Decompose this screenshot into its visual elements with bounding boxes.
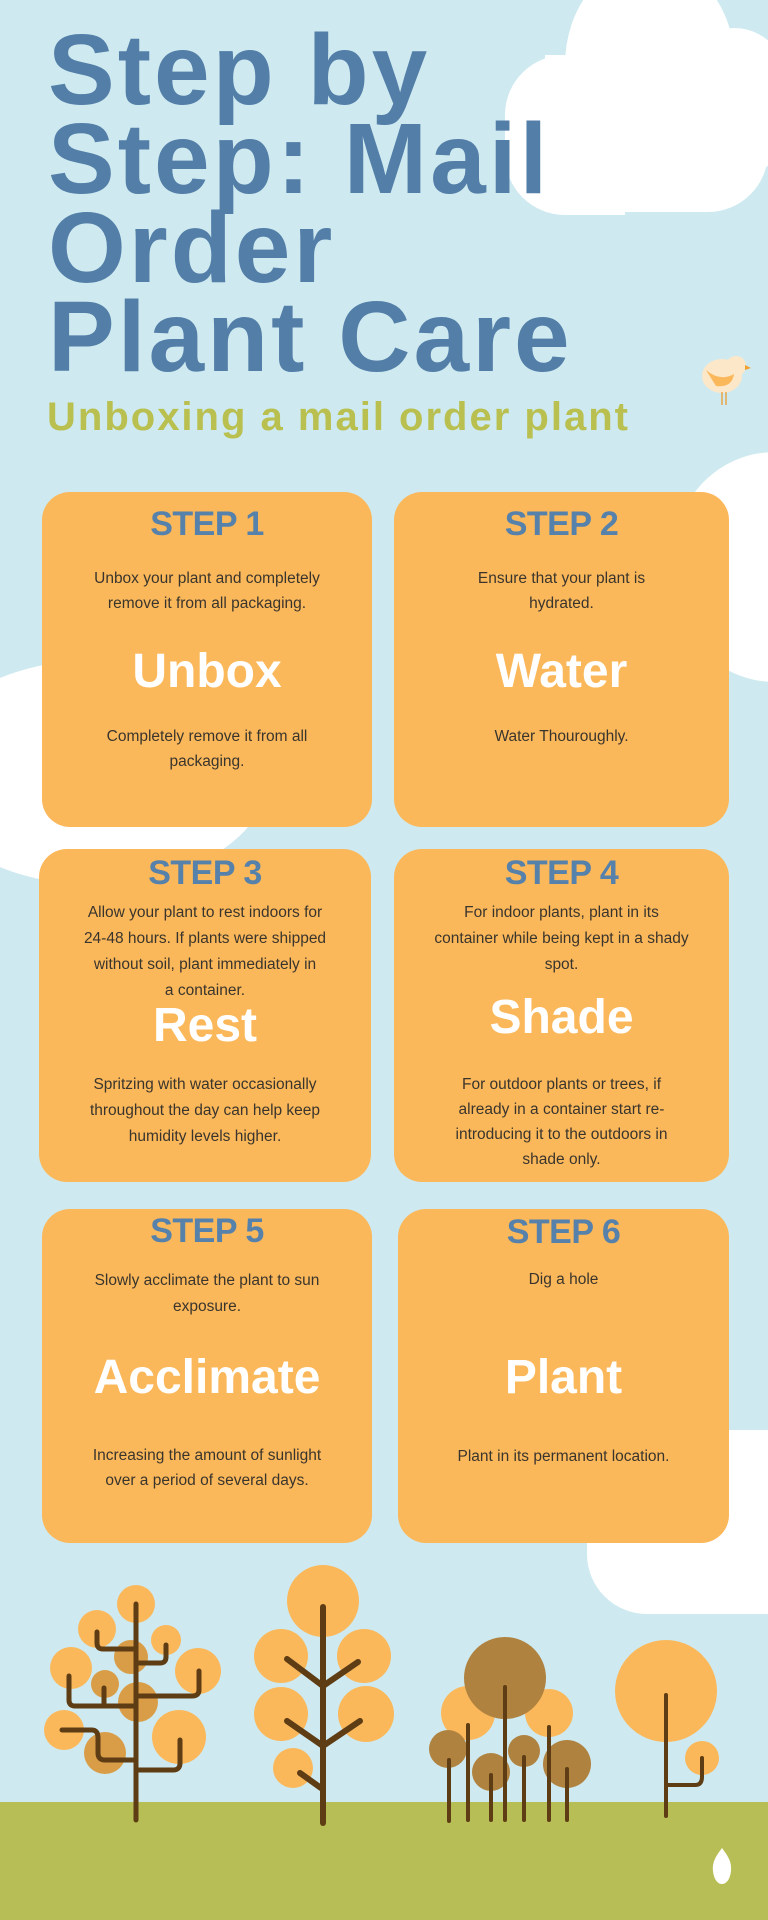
text: step 1 detail: Completely remove it from all: [107, 728, 307, 745]
title: Order: [48, 192, 335, 304]
text: step 6 detail: Plant in its permanent location.: [458, 1448, 669, 1465]
text: step 3 intro: without soil, plant immediately in: [94, 956, 316, 973]
text: step 1 intro: remove it from all packaging.: [108, 595, 306, 612]
text: step 4 detail: For outdoor plants or trees, if: [462, 1076, 661, 1093]
panel: step 3: [39, 849, 371, 1182]
text: step 5 detail: over a period of several days.: [105, 1472, 309, 1489]
subtitle: Unboxing a mail order plant: [47, 395, 630, 439]
heading: step 3: STEP 3: [148, 854, 262, 892]
text: step 4 intro: For indoor plants, plant in its: [464, 904, 659, 921]
title: [48, 14, 573, 393]
heading: step 1: STEP 1: [150, 505, 264, 543]
text: step 4 detail: shade only.: [522, 1151, 601, 1168]
cloud: right middle: [675, 452, 768, 682]
text: step 1 intro: Unbox your plant and completely: [94, 570, 320, 587]
trees illustration: [44, 1565, 719, 1826]
text: step 3 intro: [84, 904, 326, 999]
cloud: top right: [505, 0, 768, 215]
text: step 4 intro: [434, 904, 689, 973]
word: Plant: Plant: [505, 1351, 622, 1404]
text: step 2 intro: [478, 570, 645, 612]
text: step 1 detail: packaging.: [170, 753, 244, 770]
tree 1: [44, 1585, 221, 1820]
cloud: left middle: [0, 660, 270, 885]
panel: step 6: [398, 1209, 729, 1543]
title: Step: Mail: [48, 103, 550, 215]
ground: [0, 1802, 768, 1920]
text: step 2 intro: Ensure that your plant is: [478, 570, 645, 587]
title: Step by: [48, 14, 430, 126]
word: Acclimate: Acclimate: [94, 1351, 320, 1404]
heading: step 2: STEP 2: [505, 505, 618, 543]
panel: step 4: [394, 849, 729, 1182]
text: step 5 detail: Increasing the amount of sunlight: [93, 1447, 321, 1464]
text: step 3 intro: 24-48 hours. If plants were shipped: [84, 930, 326, 947]
icon: bird: [702, 356, 751, 405]
heading: step 4: STEP 4: [505, 854, 618, 892]
text: step 2 detail: Water Thouroughly.: [494, 728, 629, 745]
icon: seed logo: [712, 1848, 732, 1884]
text: step 5 detail: [93, 1447, 322, 1489]
cloud: bottom right: [587, 1430, 768, 1614]
text: step 4 intro: container while being kept in a shady: [434, 930, 689, 947]
text: step 6 intro: Dig a hole: [529, 1271, 598, 1288]
text: step 4 intro: spot.: [545, 956, 578, 973]
text: step 3 detail: [90, 1076, 320, 1145]
word: Unbox: Unbox: [132, 645, 282, 698]
panel: step 1: [42, 492, 372, 827]
heading: step 6: STEP 6: [507, 1213, 620, 1251]
text: step 4 detail: introducing it to the outdoors in: [456, 1126, 667, 1143]
text: step 5 intro: exposure.: [173, 1298, 241, 1315]
text: step 1 detail: [107, 728, 307, 770]
panel: step 2: [394, 492, 729, 827]
tree 4: [615, 1640, 719, 1816]
word: Rest: Rest: [153, 999, 257, 1052]
text: step 4 detail: [456, 1076, 667, 1168]
title: Plant Care: [48, 281, 573, 393]
text: step 2 intro: hydrated.: [529, 595, 594, 612]
tree 3: [429, 1637, 591, 1821]
text: step 4 detail: already in a container start re-: [459, 1101, 664, 1118]
text: step 1 intro: [94, 570, 320, 612]
text: step 3 detail: Spritzing with water occasionally: [93, 1076, 317, 1093]
word: Shade: Shade: [489, 991, 634, 1044]
text: step 3 intro: a container.: [165, 982, 245, 999]
text: step 5 intro: [95, 1272, 319, 1315]
word: Water: Water: [496, 645, 627, 698]
text: step 3 detail: throughout the day can help keep: [90, 1102, 320, 1119]
text: step 5 intro: Slowly acclimate the plant to sun: [95, 1272, 319, 1289]
panel: step 5: [42, 1209, 372, 1543]
tree 2: [254, 1565, 394, 1823]
heading: step 5: STEP 5: [150, 1212, 264, 1250]
text: step 3 intro: Allow your plant to rest indoors for: [88, 904, 322, 921]
text: step 3 detail: humidity levels higher.: [129, 1128, 281, 1145]
